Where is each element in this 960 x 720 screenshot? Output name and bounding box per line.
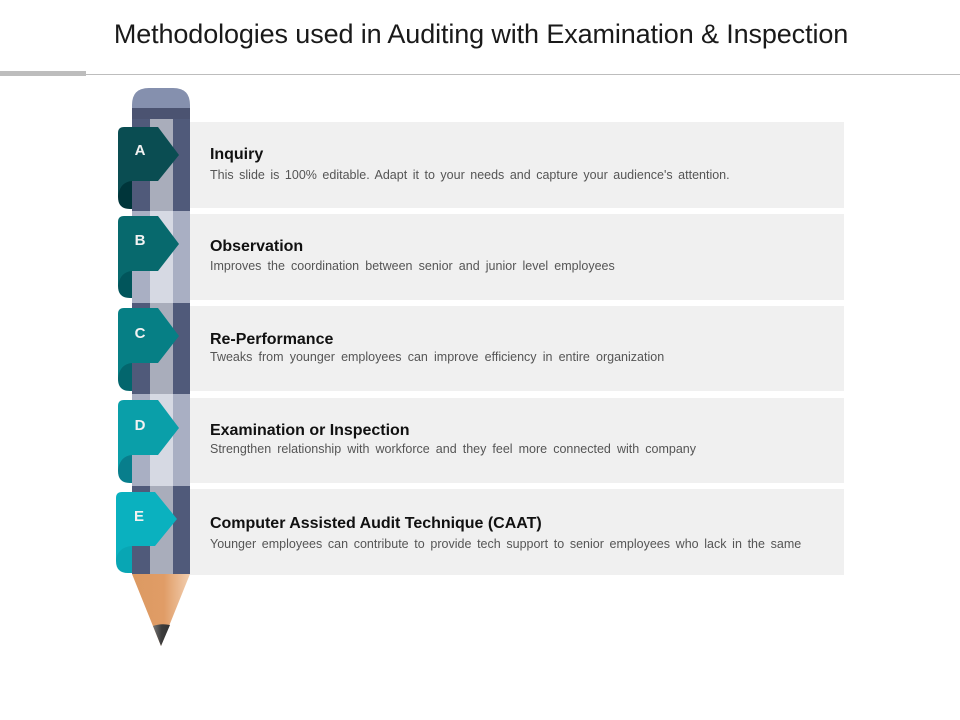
tag D: D [135,417,146,434]
text: Observation description: Improves the coordination between senior and junior level employees [210,259,615,273]
panel: row E CAAT [190,489,844,575]
tag E [116,492,177,573]
tag C [118,308,179,391]
tag B [118,216,179,298]
heading: Computer Assisted Audit Technique: Computer Assisted Audit Technique (CAAT) [210,515,542,532]
tag A: A [135,142,146,159]
panel: row C Re-Performance [190,306,844,391]
tag A [118,127,179,209]
text: Examination description: Strengthen relationship with workforce and they feel more connected with company [210,442,696,456]
text: CAAT description: Younger employees can contribute to provide tech support to senior employees who lack in the same [210,537,801,551]
title: Methodologies used in Auditing with Examination & Inspection [114,19,848,49]
panel: row B Observation [190,214,844,300]
heading: Inquiry: Inquiry [210,146,263,163]
tag E: E [134,508,144,525]
title rule [0,71,960,76]
pencil body [132,119,190,574]
heading: Examination or Inspection: Examination or Inspection [210,422,410,439]
pencil lead [153,624,170,646]
pencil ferrule band [132,108,190,119]
text: Inquiry description: This slide is 100% editable. Adapt it to your needs and capture your audience's attention. [210,168,730,182]
tag C: C [135,325,146,342]
heading: Observation: Observation [210,238,303,255]
panel: row D Examination or Inspection [190,398,844,483]
pencil [132,88,190,646]
pencil eraser [132,88,190,108]
pencil wood tip [132,574,190,646]
heading: Re-Performance: Re-Performance [210,331,333,348]
tag D [118,400,179,483]
tag B: B [135,232,146,249]
panel: row A Inquiry [190,122,844,208]
text: Re-Performance description: Tweaks from younger employees can improve efficiency in entire organization [210,350,664,364]
